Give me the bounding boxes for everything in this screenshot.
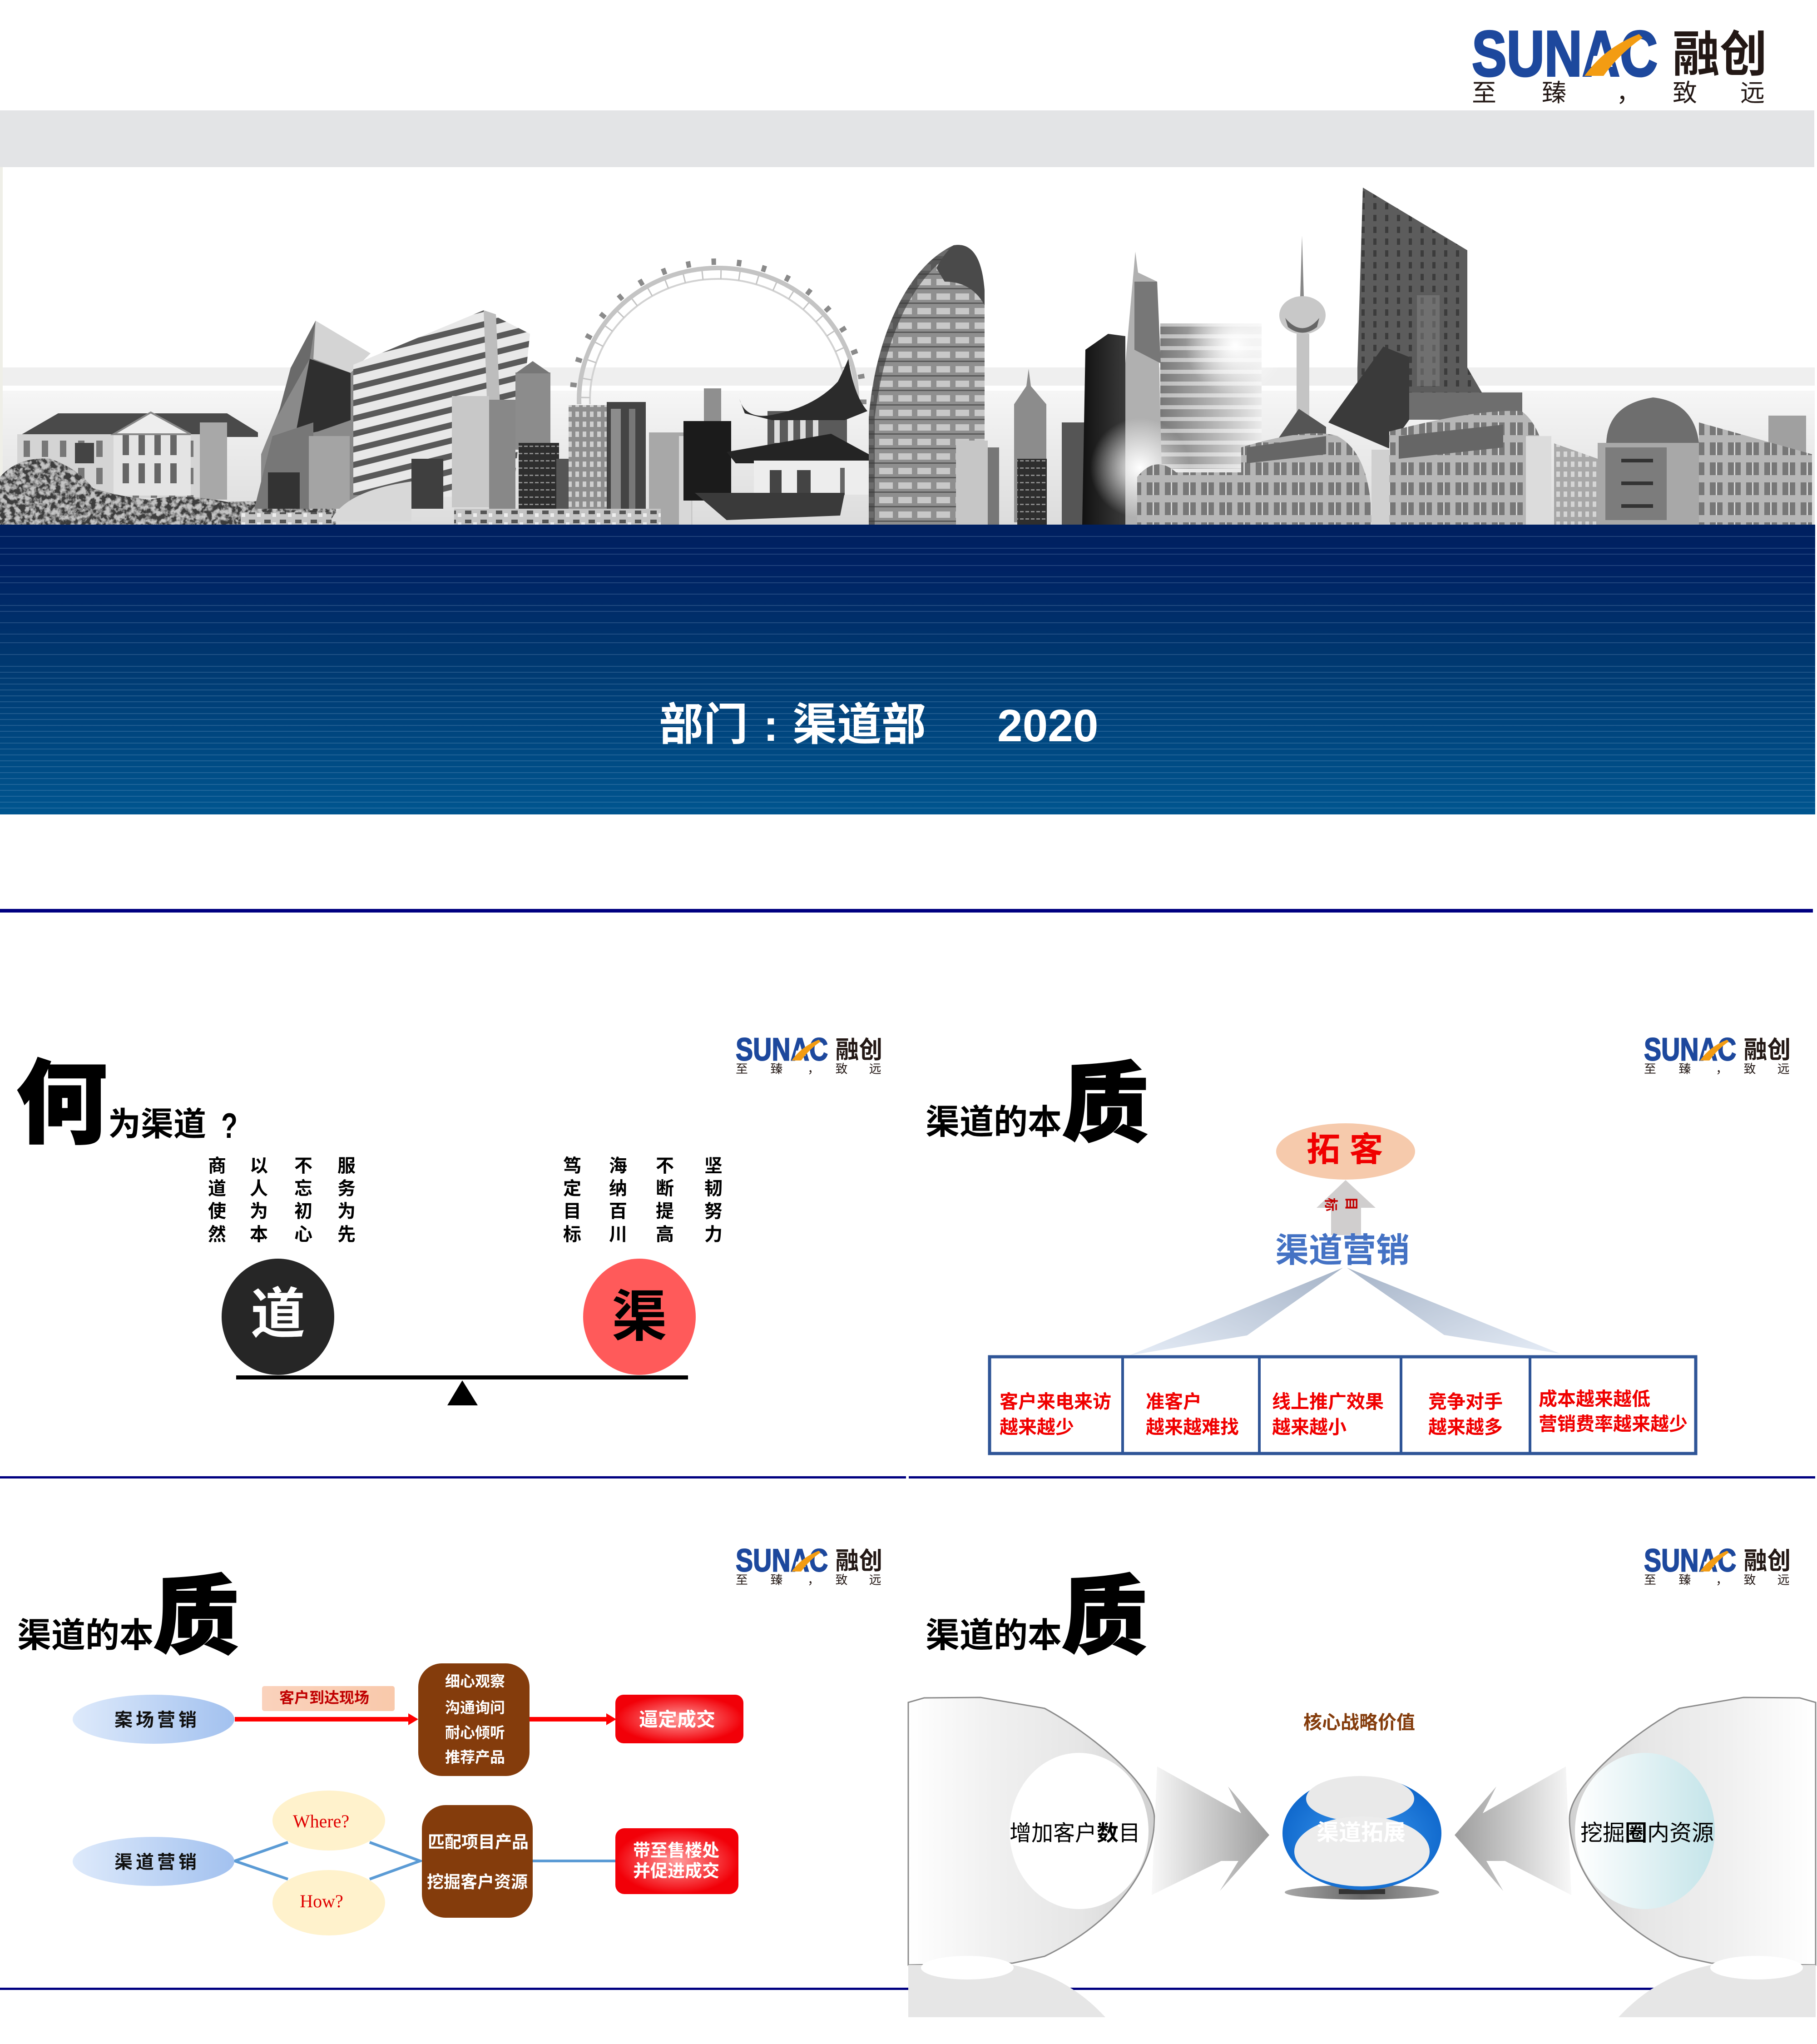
right lens with label: 挖掘圈内资源 (1580, 1821, 1714, 1846)
arrow: target: 标 (1323, 1198, 1338, 1211)
pagoda (683, 359, 869, 520)
text columns: 渠: 韧 (704, 1179, 723, 1199)
slide divider (909, 1476, 1815, 1478)
brown box: on-site steps: 沟通询问 (445, 1699, 505, 1716)
left lens with label (908, 1697, 1154, 2017)
cell 5: 营销费率越来越少 (1539, 1414, 1688, 1434)
striped high-rise (330, 310, 569, 521)
slide divider (0, 1476, 906, 1478)
heading: 为渠道 (108, 1106, 206, 1143)
text columns: 渠: 断 (656, 1179, 674, 1199)
brown box: channel steps (422, 1805, 533, 1918)
heading (17, 1569, 239, 1665)
panel: cover slide (0, 18, 1815, 913)
slide logo: 融创 (1744, 1037, 1791, 1064)
arrow: target (1317, 1180, 1376, 1235)
slide logo: 致 (1744, 1062, 1756, 1076)
CCTV tower (254, 321, 371, 509)
grey header band (0, 110, 1814, 167)
text columns: 道: 先 (337, 1225, 356, 1245)
panel: what is channel (0, 1032, 906, 1478)
heading: 渠道的本 (926, 1103, 1062, 1141)
arrow: to brown box (235, 1713, 418, 1725)
wedge arrows (1129, 1268, 1560, 1355)
red box: bring to sales office: 并促进成交 (633, 1862, 719, 1881)
slide logo: 致 (1744, 1573, 1756, 1587)
slide divider row 3 (0, 1988, 1815, 1990)
text columns: 渠: 百 (609, 1201, 627, 1221)
ellipse: on-site marketing: 案场营销 (114, 1710, 200, 1730)
text columns: 道: 人 (250, 1179, 268, 1199)
text columns: 渠: 纳 (609, 1179, 627, 1199)
logo: SUNAC 融创: 至 (1472, 79, 1496, 107)
text columns: 渠: 定 (563, 1179, 581, 1199)
slide logo: 远 (869, 1573, 881, 1587)
cover title (659, 700, 1098, 751)
text columns: 渠: 目 (563, 1201, 581, 1221)
red box: close deal: 逼定成交 (639, 1709, 715, 1730)
heading: 质 (1062, 1057, 1149, 1153)
heading: 渠道的本 (926, 1616, 1062, 1654)
logo: SUNAC 融创 (1472, 18, 1767, 107)
heading: ? (221, 1106, 238, 1146)
logo: SUNAC 融创: SUNAC (1472, 18, 1658, 90)
villa (17, 412, 258, 500)
cell 1: 越来越少 (1000, 1417, 1074, 1438)
logo: SUNAC 融创: 远 (1740, 79, 1765, 107)
text columns: 道: 道 (208, 1179, 226, 1199)
heading: 质 (153, 1569, 239, 1665)
slide logo: 臻 (1679, 1573, 1691, 1587)
cover title: 渠道部 (792, 700, 926, 749)
heading (926, 1569, 1147, 1665)
text columns: 道: 为 (250, 1201, 268, 1221)
globe: channel expansion: 渠道拓展 (1317, 1821, 1406, 1845)
balance beam (236, 1375, 688, 1405)
slide logo: 致 (836, 1062, 848, 1076)
slide logo: 融创 (836, 1037, 882, 1064)
ball: 渠 (583, 1259, 696, 1375)
slide logo: SUNAC (736, 1032, 828, 1067)
brown box: on-site steps (418, 1663, 530, 1776)
text columns: 渠: 努 (704, 1201, 723, 1221)
sky tower (1357, 188, 1482, 392)
brown box: on-site steps: 细心观察 (445, 1673, 505, 1690)
low-rise row (1137, 392, 1812, 525)
ball: 道: 道 (251, 1284, 305, 1344)
bubble: where (272, 1791, 385, 1851)
text columns: 渠: 川 (609, 1225, 627, 1245)
slide logo (736, 1032, 882, 1076)
panel: core strategic value (908, 1543, 1816, 2017)
text columns: 渠: 高 (656, 1225, 674, 1245)
brown box: channel steps: 匹配项目产品 (428, 1833, 529, 1851)
heading: 质 (1062, 1569, 1147, 1665)
slide logo: 至 (1644, 1573, 1656, 1587)
text columns: 渠: 标 (563, 1225, 581, 1245)
ellipse: channel marketing: 渠道营销 (114, 1852, 200, 1872)
cover title: 部门 (659, 700, 748, 749)
text columns: 道: 不 (294, 1156, 312, 1176)
text columns: 道: 使 (208, 1201, 226, 1221)
text columns: 渠 (563, 1156, 723, 1245)
text columns: 道: 本 (250, 1225, 268, 1245)
cover divider (0, 909, 1813, 913)
heading: 渠道的本 (17, 1616, 153, 1654)
logo: SUNAC 融创: ， (1616, 79, 1641, 107)
ball: 道 (222, 1259, 334, 1375)
left lens with label: 增加客户数目 (1010, 1821, 1140, 1846)
text columns: 道: 忘 (294, 1179, 312, 1199)
red box: bring to sales office: 带至售楼处 (633, 1841, 719, 1860)
red box: bring to sales office (615, 1828, 738, 1894)
heading (16, 1054, 238, 1155)
text columns: 道: 以 (250, 1156, 268, 1176)
text columns: 道: 初 (294, 1201, 312, 1221)
text columns: 道: 为 (337, 1201, 356, 1221)
slide logo: 致 (836, 1573, 848, 1587)
cell 2: 准客户 (1146, 1391, 1202, 1412)
slide logo: 远 (869, 1062, 881, 1076)
cell 4: 越来越多 (1428, 1417, 1503, 1438)
slide logo: 融创 (1744, 1548, 1791, 1575)
curved tower (869, 245, 999, 525)
slide logo (1644, 1543, 1791, 1587)
cover title: : (763, 700, 778, 750)
arrow: to close (530, 1713, 616, 1725)
cell 2: 越来越难找 (1146, 1417, 1239, 1438)
channel marketing label: 渠道营销 (1275, 1231, 1410, 1269)
text columns: 道: 心 (294, 1225, 312, 1245)
label: customer arrives: 客户到达现场 (279, 1689, 369, 1706)
slide logo: 远 (1777, 1573, 1790, 1587)
slide logo: 至 (1644, 1062, 1656, 1076)
slide logo: 至 (736, 1573, 748, 1587)
slide logo: 臻 (771, 1573, 783, 1587)
logo: SUNAC 融创: 臻 (1542, 79, 1566, 107)
logo: SUNAC 融创: 致 (1673, 79, 1697, 107)
cell 3: 线上推广效果 (1272, 1391, 1384, 1412)
text columns: 道: 商 (208, 1156, 226, 1176)
text columns: 道: 然 (208, 1225, 226, 1245)
text columns: 道: 服 (337, 1156, 356, 1176)
bubble: how: How? (300, 1891, 343, 1911)
slide logo: ， (807, 1573, 820, 1587)
slide logo: ， (1716, 1062, 1728, 1076)
trees (0, 459, 336, 525)
slide logo: ， (807, 1062, 820, 1076)
text columns: 道: 务 (337, 1179, 356, 1199)
cover title: 2020 (997, 700, 1098, 751)
glass block and bank tower (1090, 252, 1409, 525)
TV tower (1279, 236, 1326, 429)
cell 4: 竞争对手 (1428, 1391, 1503, 1412)
cell 5: 成本越来越低 (1539, 1389, 1650, 1409)
slide logo: 臻 (771, 1062, 783, 1076)
slide logo: SUNAC (1644, 1032, 1736, 1067)
text columns: 渠: 笃 (563, 1156, 581, 1176)
heading: 何 (16, 1054, 107, 1155)
street-level buildings (241, 509, 661, 525)
slide logo (736, 1543, 882, 1587)
brown box: channel steps: 挖掘客户资源 (427, 1873, 528, 1891)
goal ellipse (1276, 1123, 1415, 1180)
mid towers (1014, 334, 1125, 525)
slide logo: SUNAC (736, 1543, 828, 1578)
label: customer arrives (262, 1686, 395, 1711)
brown box: on-site steps: 耐心倾听 (445, 1724, 505, 1741)
text columns: 渠: 不 (656, 1156, 674, 1176)
panel: on-site vs channel marketing (17, 1543, 882, 1935)
ball: 渠: 渠 (612, 1286, 667, 1348)
slide logo (1644, 1032, 1791, 1076)
ellipse: on-site marketing (73, 1695, 234, 1744)
slide logo: 远 (1777, 1062, 1790, 1076)
table of channel drivers (990, 1357, 1696, 1454)
logo: SUNAC 融创: 融创 (1673, 27, 1767, 82)
blue title band (0, 525, 1815, 814)
slide logo: ， (1716, 1573, 1728, 1587)
bubble: where: Where? (293, 1811, 349, 1831)
heading (926, 1057, 1149, 1153)
text columns: 渠: 坚 (704, 1156, 723, 1176)
arrow: right funnel (1455, 1766, 1571, 1895)
slide logo: 臻 (1679, 1062, 1691, 1076)
brown box: on-site steps: 推荐产品 (445, 1749, 505, 1766)
goal ellipse: 拓 客 (1307, 1131, 1383, 1168)
red box: close deal (615, 1695, 743, 1743)
slide logo: SUNAC (1644, 1543, 1736, 1578)
panel: essence of channel, customer acquisition (909, 1032, 1815, 1478)
cell 3: 越来越小 (1272, 1417, 1347, 1438)
slide logo: 融创 (836, 1548, 882, 1575)
cell 1: 客户来电来访 (1000, 1391, 1111, 1412)
text columns: 道 (208, 1156, 356, 1245)
right lens with label (1569, 1697, 1816, 2017)
arrow: left funnel (1152, 1766, 1269, 1895)
subtitle: 核心战略价值 (1303, 1712, 1415, 1733)
slide logo: 至 (736, 1062, 748, 1076)
text columns: 渠: 力 (704, 1225, 723, 1245)
illustration: city skyline (0, 167, 1815, 538)
ellipse: channel marketing (73, 1837, 234, 1886)
text columns: 渠: 海 (609, 1156, 627, 1176)
globe: channel expansion (1282, 1776, 1441, 1900)
arrow: target: 目 (1343, 1197, 1358, 1211)
twin tower cluster (569, 402, 692, 525)
bubble: how (272, 1870, 385, 1935)
text columns: 渠: 提 (656, 1201, 674, 1221)
connector lines (235, 1842, 615, 1879)
